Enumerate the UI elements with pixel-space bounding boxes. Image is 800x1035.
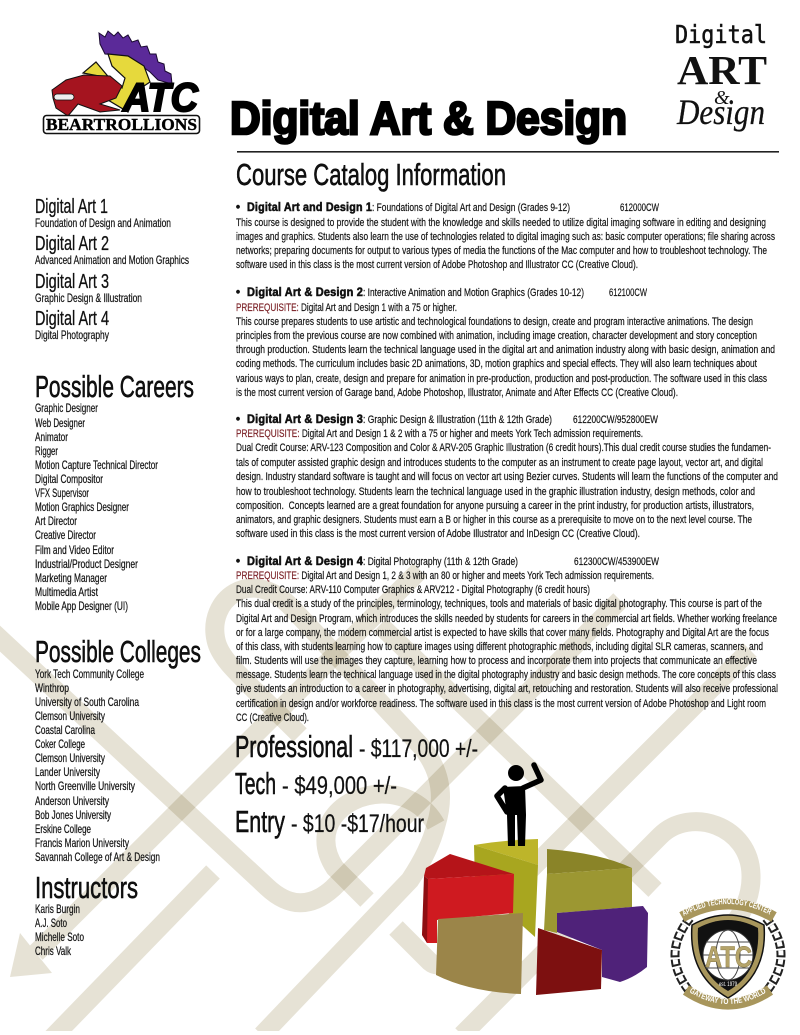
sidebar: instructors: Chris Valk (35, 944, 71, 958)
course 2 description: 612100CW (609, 287, 647, 299)
course 4 description: : Digital Photography (11th & 12th Grade) (363, 556, 518, 568)
salary ranges: - $49,000 +/- (282, 772, 397, 800)
sidebar: instructors: Michelle Soto (35, 930, 84, 944)
sidebar: possible colleges: Bob Jones University (35, 808, 111, 822)
bottom ribbon (686, 990, 770, 1004)
sidebar: instructors: Karis Burgin (35, 902, 80, 916)
sidebar: possible careers: Creative Director (35, 528, 96, 542)
tan slice (436, 913, 523, 994)
sidebar: course list: Digital Art 4 (35, 308, 109, 330)
sidebar: possible colleges: Coker College (35, 737, 85, 751)
logo: Digital Art & Design wordmark: & (714, 87, 730, 109)
ATC lettering: ATC (122, 76, 199, 120)
title: Digital Art & Design (230, 92, 627, 144)
sidebar: possible careers: Marketing Manager (35, 571, 107, 585)
sidebar: possible careers: Digital Compositor (35, 472, 103, 486)
course 4 description: 612300CW/453900EW (574, 556, 659, 568)
course 1 description (236, 202, 775, 271)
olive right slice (547, 849, 632, 874)
sidebar: possible careers: VFX Supervisor (35, 486, 89, 500)
course 1 description: 612000CW (620, 202, 659, 214)
sidebar: course list: Digital Art 3 (35, 271, 109, 293)
sidebar: possible colleges: Lander University (35, 765, 100, 779)
logo: Applied Technology Center seal: APPLIED TECHNOLOGY CENTER (682, 898, 772, 916)
sidebar: course list: Foundation of Design and Animation (35, 216, 171, 230)
salary ranges (235, 729, 478, 839)
sidebar: possible careers: Animator (35, 430, 68, 444)
course 4 description: Dual Credit Course: ARV-110 Computer Graphics & ARV212 - Digital Photography (6 credit hours) (236, 584, 590, 596)
course 4 description: PREREQUISITE: Digital Art and Design 1, 2 & 3 with an 80 or higher and meets York Tech admission requirements. (236, 570, 654, 582)
sidebar: possible colleges: University of South Carolina (35, 695, 139, 709)
course 1 description: software used in this class is the most current version of Adobe Photoshop and Illustrator CC (Creative Cloud). (236, 259, 638, 271)
sidebar: possible careers: Industrial/Product Designer (35, 557, 138, 571)
red slice (424, 854, 514, 879)
salary ranges: Tech (235, 766, 276, 801)
course 2 description: • (236, 287, 240, 299)
header rule (237, 151, 779, 153)
sidebar: possible colleges: Erskine College (35, 822, 91, 836)
sidebar: course list (35, 196, 189, 342)
sidebar: possible colleges: Savannah College of Art & Design (35, 850, 160, 864)
course 4 description: CC (Creative Cloud). (236, 712, 309, 724)
salary ranges: Professional (235, 729, 353, 764)
sidebar: instructors (35, 870, 138, 958)
sidebar: possible colleges: Coastal Carolina (35, 723, 95, 737)
sidebar: possible careers: Motion Graphics Designer (35, 500, 129, 514)
icon: 3D pie chart with figure (422, 765, 648, 995)
course 2 description: PREREQUISITE: Digital Art and Design 1 with a 75 or higher. (236, 302, 457, 314)
sidebar: course list: Advanced Animation and Motion Graphics (35, 253, 189, 267)
salary ranges: - $117,000 +/- (359, 735, 478, 763)
logo: ATC Beartrollions mascot: BEARTROLLIONS (46, 115, 197, 134)
sidebar: possible colleges: York Tech Community College (35, 667, 144, 681)
sidebar: possible colleges: North Greenville University (35, 779, 135, 793)
sidebar: possible colleges: Anderson University (35, 794, 109, 808)
course 2 description: : Interactive Animation and Motion Graphics (Grades 10-12) (363, 287, 584, 299)
course 3 description: • (236, 414, 240, 426)
logo: Digital Art & Design wordmark: Design (676, 92, 765, 132)
course 4 description: • (236, 556, 240, 568)
sidebar: possible colleges (35, 634, 201, 864)
sidebar: possible careers: Possible Careers (35, 369, 194, 404)
sidebar: course list: Digital Art 1 (35, 196, 108, 218)
sidebar: possible careers: Mobile App Designer (UI) (35, 599, 128, 613)
sidebar: possible careers: Multimedia Artist (35, 585, 99, 599)
olive back slice (474, 839, 538, 865)
logo: Digital Art & Design wordmark: ART (677, 47, 767, 93)
course 3 description: : Graphic Design & Illustration (11th & 12th Grade) (363, 414, 552, 426)
sidebar: instructors: Instructors (35, 870, 138, 905)
helmet and visor (83, 54, 150, 112)
shield (692, 915, 764, 998)
course 3 description: software used in this class is the most current version of Adobe Illustrator and InDesign CC (Creative Cloud). (236, 528, 640, 540)
wreath (675, 918, 781, 992)
sidebar: possible colleges: Possible Colleges (35, 634, 201, 669)
sidebar: possible careers: Rigger (35, 444, 58, 458)
course 1 description: : Foundations of Digital Art and Design (Grades 9-12) (372, 202, 570, 214)
course 1 description: • (236, 202, 240, 214)
standing figure (497, 765, 541, 846)
sidebar: possible colleges: Clemson University (35, 751, 105, 765)
sidebar: possible careers: Web Designer (35, 416, 85, 430)
sidebar: possible careers: Graphic Designer (35, 401, 98, 415)
sidebar: possible careers (35, 369, 194, 613)
course 4 description (236, 556, 778, 724)
seal monogram: ATC (705, 941, 752, 974)
logo: Applied Technology Center seal: est. 1979 (719, 982, 737, 988)
logo: Digital Art & Design wordmark (675, 20, 767, 132)
salary ranges: - $10 -$17/hour (291, 810, 424, 838)
salary ranges: Entry (235, 804, 285, 839)
horse head (52, 75, 122, 116)
course 3 description: 612200CW/952800EW (573, 414, 658, 426)
background arrow pattern (0, 570, 800, 1035)
sidebar: possible careers: Film and Video Editor (35, 543, 114, 557)
sidebar: possible colleges: Clemson University (35, 709, 105, 723)
sidebar: instructors: A.J. Soto (35, 916, 67, 930)
sidebar: possible careers: Motion Capture Technical Director (35, 458, 158, 472)
course 2 description (236, 287, 775, 399)
course 2 description: Digital Art & Design 2 (247, 287, 363, 299)
sidebar: course list: Digital Photography (35, 328, 109, 342)
Beartrollions plate (44, 116, 200, 134)
sidebar: possible colleges: Winthrop (35, 681, 69, 695)
course 4 description: Digital Art & Design 4 (247, 556, 363, 568)
top ribbon (682, 904, 774, 917)
logo: Digital Art & Design wordmark: Digital (675, 20, 767, 49)
sidebar: course list: Digital Art 2 (35, 233, 109, 255)
logo: ATC Beartrollions mascot (44, 31, 200, 134)
course 3 description (236, 414, 778, 540)
subheading: Course Catalog Information (236, 157, 506, 192)
course 1 description: Digital Art and Design 1 (247, 202, 372, 214)
sidebar: course list: Graphic Design & Illustration (35, 291, 142, 305)
sidebar: possible careers: Art Director (35, 514, 77, 528)
globe (703, 930, 753, 980)
dark red slice (536, 928, 602, 995)
purple slice (557, 906, 648, 982)
course 3 description: Digital Art & Design 3 (247, 414, 363, 426)
logo: Applied Technology Center seal (670, 898, 786, 1010)
sidebar: possible colleges: Francis Marion University (35, 836, 129, 850)
helmet crest (99, 31, 172, 84)
logo: Applied Technology Center seal: GATEWAY TO THE WORLD (690, 988, 766, 1004)
course 3 description: PREREQUISITE: Digital Art and Design 1 & 2 with a 75 or higher and meets York Tech admission requirements. (236, 428, 643, 440)
